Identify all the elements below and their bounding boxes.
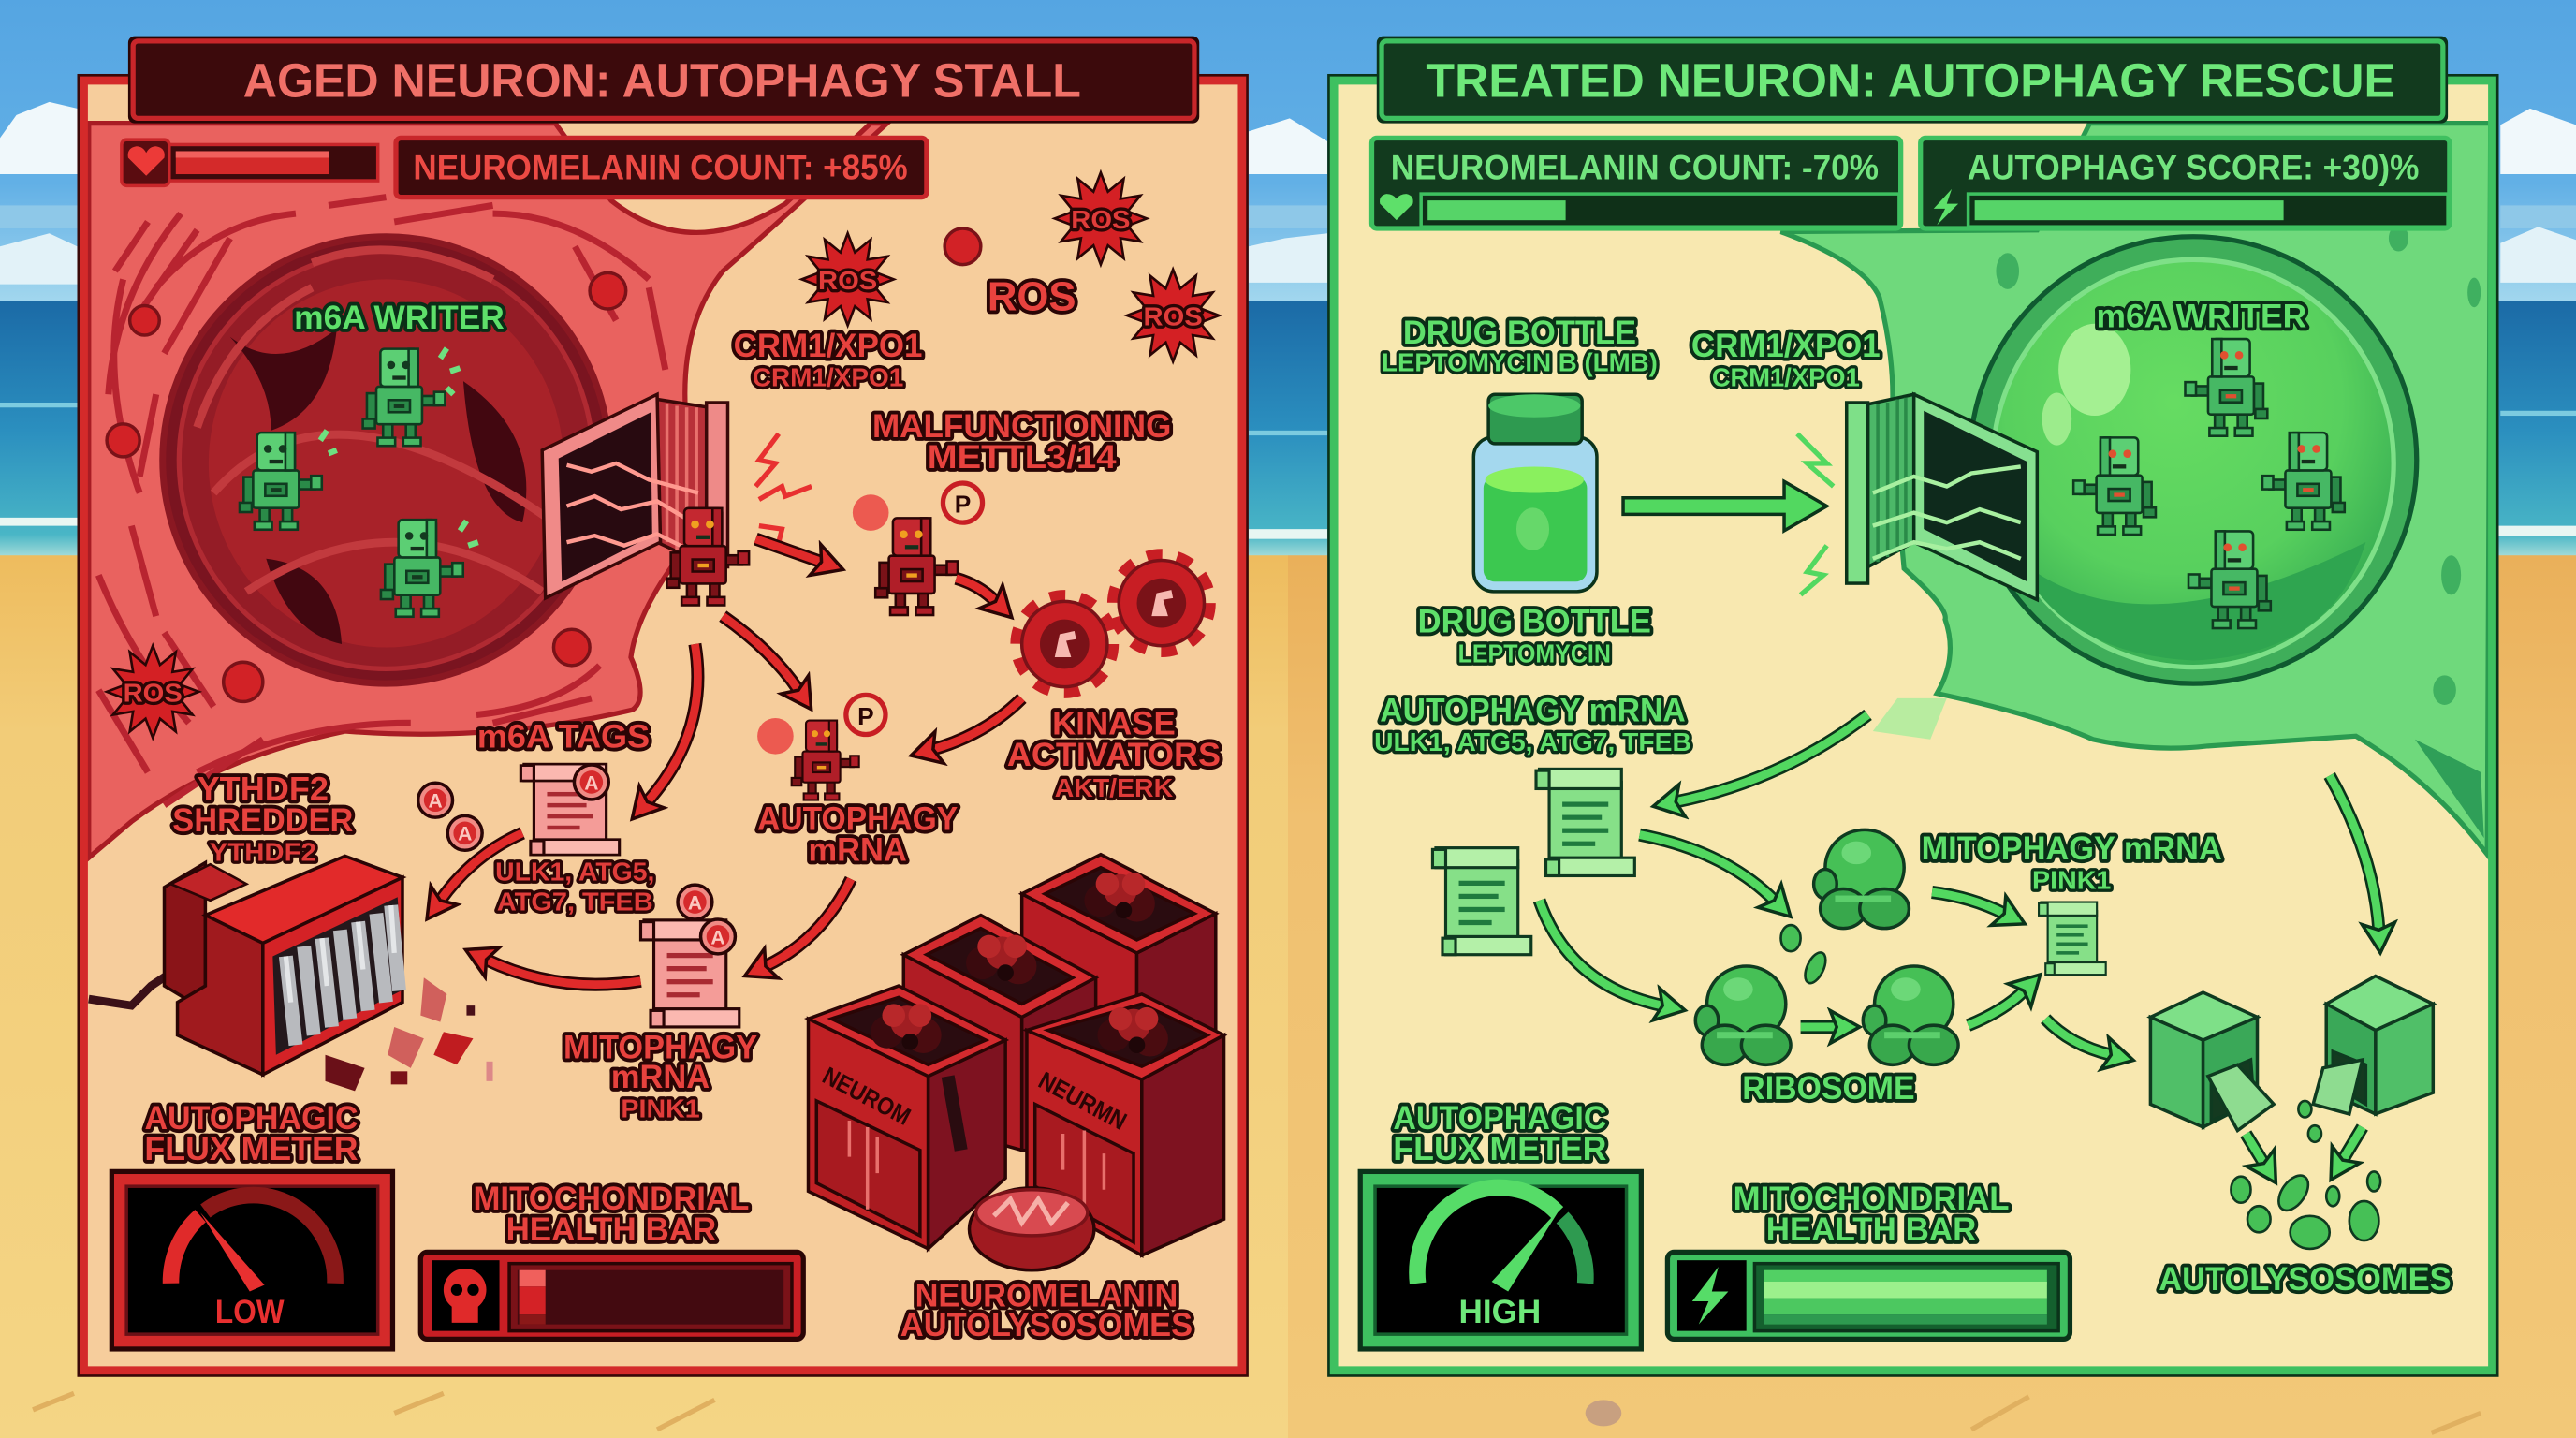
label: kinase activators: KINASE (1052, 706, 1176, 742)
nuclear pore door (1847, 394, 2037, 600)
status: autophagy score with bar: AUTOPHAGY SCORE: +30)% (1968, 148, 2419, 186)
label: malfunctioning METTL3/14: MALFUNCTIONING (872, 408, 1171, 445)
status: neuromelanin count with bar: NEUROMELANIN COUNT: -70% (1391, 148, 1879, 186)
arrows: green pathway (1540, 714, 2378, 1164)
label: autophagic flux meter: FLUX METER (1393, 1131, 1606, 1167)
label: drug bottle bottom: DRUG BOTTLE (1418, 604, 1651, 640)
label: autophagy mRNA (1374, 692, 1691, 756)
neuron cell body (1781, 124, 2491, 855)
flux meter: low: LOW (215, 1294, 285, 1330)
panel frame (79, 76, 1247, 1375)
label: mitochondrial health bar: HEALTH BAR (506, 1211, 716, 1248)
red sparks (755, 433, 812, 549)
label: YTHDF2 shredder: YTHDF2 (210, 838, 316, 867)
nucleus (1969, 237, 2417, 683)
label: CRM1/XPO1 (1691, 328, 1881, 391)
icon: autolysosome machines (2150, 976, 2433, 1131)
label: malfunctioning METTL3/14 (872, 408, 1171, 476)
label: drug bottle top: LEPTOMYCIN B (LMB) (1382, 348, 1658, 377)
status: heart health bar (122, 139, 378, 185)
label: autophagic flux meter: AUTOPHAGIC (144, 1100, 359, 1137)
label: mitochondrial health bar: MITOCHONDRIAL (473, 1181, 749, 1217)
header: treated neuron (1379, 37, 2446, 122)
label: mitophagy mRNA (1922, 830, 2222, 895)
icon: neuromelanin crates (809, 855, 1224, 1255)
label: drug bottle bottom (1418, 604, 1651, 668)
panel frame (1329, 76, 2497, 1375)
label: mitochondrial health bar (473, 1181, 749, 1248)
header: treated neuron: TREATED NEURON: AUTOPHAGY RESCUE (1426, 54, 2395, 108)
ROS bursts: ROS (1071, 205, 1131, 234)
icon: neuromelanin crates: NEUROM (818, 1062, 915, 1131)
icon: healthy robots (2073, 339, 2345, 628)
label: m6A writer: m6A WRITER (2097, 298, 2306, 334)
label: autolysosomes: AUTOLYSOSOMES (2159, 1261, 2452, 1298)
cell streaks (98, 198, 666, 805)
ROS bursts: ROS (1144, 302, 1203, 331)
icon: ribosomes (1695, 829, 1958, 1064)
label: mitophagy mRNA: MITOPHAGY mRNA (1922, 830, 2222, 867)
header: aged neuron: AGED NEURON: AUTOPHAGY STALL (243, 54, 1081, 108)
flux meter: high (1360, 1171, 1641, 1349)
autolysosome fragments (2231, 1101, 2380, 1249)
icon: malfunctioning robots (666, 508, 958, 800)
label: mitophagy mRNA: mRNA (611, 1059, 710, 1095)
panel: aged neuron (79, 37, 1247, 1375)
debris near ribosomes (1781, 925, 1830, 986)
label: mitochondrial health bar: MITOCHONDRIAL (1734, 1181, 2009, 1217)
phospho badges: P (955, 491, 971, 519)
icon: damaged mitochondrion (970, 1188, 1094, 1270)
ROS bursts: ROS (818, 266, 877, 295)
health bar: nearly empty (420, 1252, 803, 1339)
phospho badges: P (857, 702, 874, 730)
icon: green heart (1380, 194, 1413, 220)
arrows: red pathway (440, 539, 1022, 985)
label: mitochondrial health bar: HEALTH BAR (1766, 1211, 1976, 1248)
label: autophagy mRNA (757, 800, 958, 869)
label: CRM1/XPO1: CRM1/XPO1 (734, 328, 922, 364)
label: drug bottle top: DRUG BOTTLE (1403, 315, 1636, 351)
label: mitophagy mRNA: MITOPHAGY (564, 1029, 757, 1065)
icon: kinase gears (1018, 557, 1208, 690)
label: YTHDF2 shredder (172, 771, 353, 867)
label: autophagic flux meter: AUTOPHAGIC (1393, 1100, 1606, 1137)
label: m6A writer: m6A WRITER (294, 300, 505, 336)
label: CRM1/XPO1: CRM1/XPO1 (1712, 362, 1860, 391)
neuron cell body (89, 124, 887, 858)
label: gene list: ULK1, ATG5, (495, 858, 654, 887)
icon: small bolt (1934, 189, 1958, 225)
icon: green robots (240, 348, 478, 617)
label: drug bottle bottom: LEPTOMYCIN (1458, 638, 1611, 668)
icon: PINK1 scroll (2039, 902, 2106, 975)
green sparks (1797, 433, 1834, 594)
label: mitophagy mRNA: PINK1 (2032, 866, 2111, 895)
icon: lightning bolt (1692, 1267, 1728, 1325)
flux meter: low (111, 1171, 392, 1349)
header: aged neuron (130, 37, 1197, 122)
label: neuromelanin autolysosomes: NEUROMELANIN (915, 1277, 1178, 1313)
label: neuromelanin autolysosomes: AUTOLYSOSOMES (900, 1307, 1193, 1343)
panel border (84, 81, 1242, 1371)
label: mitophagy mRNA: PINK1 (621, 1093, 700, 1123)
status: neuromelanin count with bar (1372, 138, 1901, 228)
icon: YTHDF2 shredder (89, 856, 404, 1075)
icon: neuromelanin crates: NEURMN (1034, 1066, 1132, 1136)
label: ribosome: RIBOSOME (1742, 1070, 1915, 1107)
label: YTHDF2 shredder: YTHDF2 (198, 771, 329, 808)
ROS bursts (107, 172, 1219, 738)
label: m6A tags: m6A TAGS (477, 719, 650, 756)
icon: mRNA scrolls with m6A tags (418, 764, 739, 1027)
label: autophagic flux meter (144, 1100, 359, 1167)
label: autophagy mRNA: AUTOPHAGY (757, 800, 958, 837)
label: autophagic flux meter: FLUX METER (144, 1131, 359, 1167)
shredded debris (326, 977, 493, 1091)
nuclear pore door (542, 394, 728, 598)
label: mitophagy mRNA (564, 1029, 757, 1123)
status: neuromelanin count (396, 138, 927, 198)
flux meter: high: HIGH (1459, 1294, 1541, 1330)
label: autophagy mRNA: AUTOPHAGY mRNA (1380, 692, 1686, 728)
label: kinase activators: AKT/ERK (1055, 773, 1174, 802)
status: neuromelanin count: NEUROMELANIN COUNT: +85% (413, 148, 908, 186)
label: autophagy mRNA: mRNA (809, 832, 907, 869)
health bar: full (1667, 1252, 2070, 1339)
label: drug bottle top (1382, 315, 1658, 377)
icon: skull (444, 1269, 487, 1323)
label: autophagy mRNA: ULK1, ATG5, ATG7, TFEB (1374, 727, 1691, 756)
icon: heart (128, 146, 165, 176)
label: CRM1/XPO1: CRM1/XPO1 (753, 362, 903, 391)
label: malfunctioning METTL3/14: METTL3/14 (928, 439, 1117, 476)
ROS bursts: ROS (124, 678, 183, 707)
label: CRM1/XPO1 (734, 328, 922, 391)
phospho badges (757, 483, 983, 755)
red vesicles (107, 228, 981, 701)
panel border (1334, 81, 2492, 1371)
arrow: drug to exportin (1623, 481, 1827, 531)
label: gene list (495, 858, 654, 916)
nucleus (163, 237, 609, 683)
label: autophagic flux meter (1393, 1100, 1606, 1167)
panel: treated neuron (1329, 37, 2497, 1375)
label: kinase activators: ACTIVATORS (1007, 737, 1221, 773)
icon: mRNA scrolls (1432, 769, 1634, 955)
label: mitochondrial health bar (1734, 1181, 2009, 1248)
label: gene list: ATG7, TFEB (497, 887, 653, 916)
label: kinase activators (1007, 706, 1221, 802)
icon: drug bottle (1473, 394, 1597, 592)
label: ROS: ROS (988, 274, 1076, 320)
label: CRM1/XPO1: CRM1/XPO1 (1691, 328, 1881, 364)
label: YTHDF2 shredder: SHREDDER (172, 802, 353, 839)
status: autophagy score with bar (1921, 138, 2450, 228)
label: neuromelanin autolysosomes (900, 1277, 1193, 1343)
